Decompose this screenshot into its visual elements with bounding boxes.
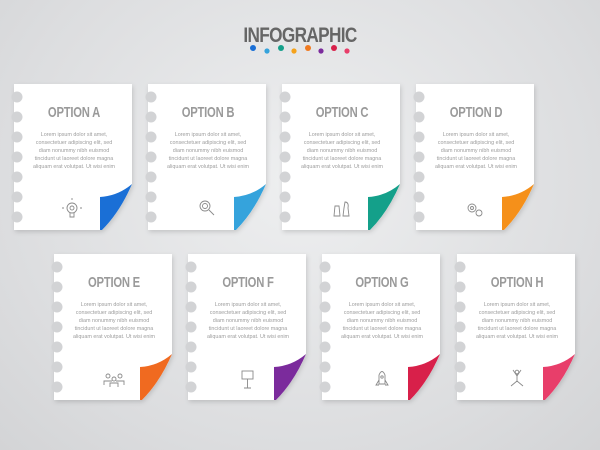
icon: gears — [468, 204, 482, 216]
panel: option H — [454, 254, 575, 400]
panel: option H: OPTION H — [491, 273, 543, 290]
panel: option F — [186, 254, 306, 400]
icon: bulb — [62, 198, 82, 217]
panel: option A: OPTION A — [48, 103, 101, 120]
icon: chess — [334, 202, 349, 216]
icon: team — [104, 374, 124, 387]
icon: presentation board — [242, 371, 253, 388]
panel: option D: OPTION D — [450, 103, 503, 120]
icon: rocket — [376, 372, 388, 385]
panel: option B: OPTION B — [182, 103, 234, 120]
panel: option C: OPTION C — [316, 103, 369, 120]
panel: option E: OPTION E — [88, 273, 140, 290]
panel: option E — [52, 254, 172, 400]
icon: magnifier — [200, 201, 214, 215]
panel: option C — [280, 84, 400, 230]
panel: option A — [12, 84, 132, 230]
panel: option G: OPTION G — [355, 273, 409, 290]
panel: option F: OPTION F — [222, 273, 274, 290]
title: INFOGRAPHIC — [243, 25, 357, 47]
icon: climber — [511, 370, 523, 386]
panel: option G — [320, 254, 440, 400]
panel: option D — [414, 84, 534, 230]
panel: option B — [146, 84, 266, 230]
